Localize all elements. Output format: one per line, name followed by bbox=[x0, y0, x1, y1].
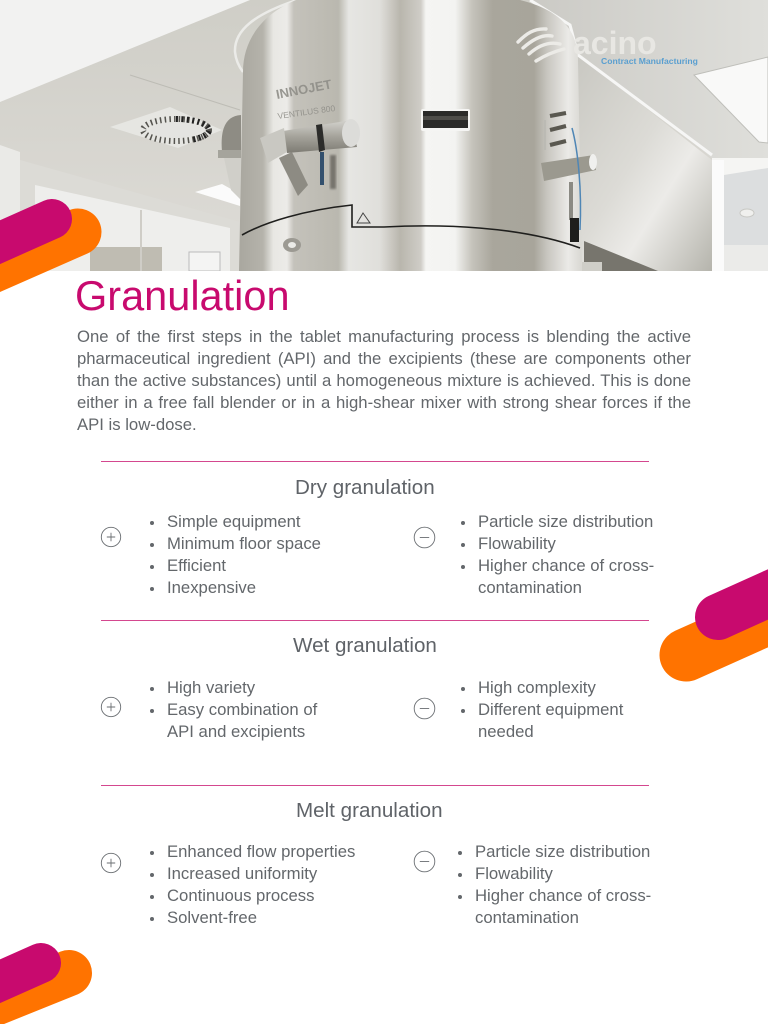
right ceiling bbox=[530, 0, 768, 158]
cons list: Flowability bbox=[478, 534, 556, 553]
pros list: Continuous process bbox=[167, 886, 314, 905]
vessel brand text: INNOJET bbox=[275, 76, 333, 102]
heading: wet granulation: Wet granulation bbox=[293, 634, 437, 657]
left nozzle assembly bbox=[260, 119, 360, 196]
cons list bbox=[458, 842, 651, 927]
pros list: Solvent-free bbox=[167, 908, 257, 927]
cons list bbox=[461, 678, 624, 741]
intro text block: either in a free fall blender or in a high-shear mixer with strong shear forces if the bbox=[77, 393, 691, 412]
intro text block: One of the first steps in the tablet manufacturing process is blending the active bbox=[77, 327, 691, 346]
heading: melt granulation: Melt granulation bbox=[296, 799, 443, 822]
pros list: Efficient bbox=[167, 556, 226, 575]
icon: minus bbox=[414, 698, 436, 720]
cons list bbox=[461, 512, 654, 597]
pros list bbox=[150, 512, 321, 597]
cons list: needed bbox=[478, 722, 534, 741]
pros list: API and excipients bbox=[167, 722, 305, 741]
right nozzle assembly bbox=[541, 113, 597, 242]
cons list: contamination bbox=[478, 578, 582, 597]
icon: minus bbox=[414, 526, 436, 548]
divider bbox=[101, 461, 649, 462]
pros list bbox=[150, 842, 355, 927]
photo: stainless steel granulator in clean room bbox=[0, 0, 768, 271]
vessel body bbox=[239, 0, 582, 271]
cons list: Flowability bbox=[475, 864, 553, 883]
right side room bbox=[712, 158, 768, 271]
section: melt granulation bbox=[100, 785, 651, 927]
pros list: Minimum floor space bbox=[167, 534, 321, 553]
section: dry granulation bbox=[100, 461, 654, 597]
logo bbox=[518, 25, 698, 66]
pros list: Easy combination of bbox=[167, 700, 317, 719]
ceiling vent bbox=[110, 107, 222, 148]
cons list: High complexity bbox=[478, 678, 596, 697]
vessel brand text: VENTILUS 800 bbox=[277, 103, 336, 121]
cons list: contamination bbox=[475, 908, 579, 927]
ceiling light bbox=[694, 57, 768, 143]
pros list: Enhanced flow properties bbox=[167, 842, 355, 861]
intro text block: pharmaceutical ingredient (API) and the excipients (these are components other bbox=[77, 349, 691, 368]
divider bbox=[101, 620, 649, 621]
side pipe bbox=[222, 115, 241, 152]
divider bbox=[101, 785, 649, 786]
intro text block: than the active substances) until a homogeneous mixture is achieved. This is done bbox=[77, 371, 691, 390]
clamp fitting bbox=[283, 238, 301, 252]
cons list: Particle size distribution bbox=[475, 842, 650, 861]
intro text block bbox=[77, 327, 691, 434]
icon: plus bbox=[100, 852, 122, 874]
title: Granulation bbox=[75, 272, 290, 319]
icon: plus bbox=[100, 696, 122, 718]
pros list bbox=[150, 678, 318, 741]
pros list: Inexpensive bbox=[167, 578, 256, 597]
icon: plus bbox=[100, 526, 122, 548]
intro text block: API is low-dose. bbox=[77, 415, 197, 434]
cons list: Different equipment bbox=[478, 700, 623, 719]
lower cone bbox=[584, 241, 658, 271]
heading: dry granulation: Dry granulation bbox=[295, 476, 435, 499]
pros list: Increased uniformity bbox=[167, 864, 317, 883]
vessel seam line bbox=[242, 205, 580, 248]
sight window bbox=[421, 109, 470, 131]
pros list: Simple equipment bbox=[167, 512, 301, 531]
vessel rim bbox=[235, 0, 297, 72]
cons list: Higher chance of cross- bbox=[478, 556, 654, 575]
decorative pills: bottom left bbox=[0, 943, 92, 1024]
logo tagline: Contract Manufacturing bbox=[601, 56, 698, 66]
bright upper ceiling bbox=[0, 0, 250, 102]
logo wordmark: acino bbox=[573, 25, 657, 61]
icon: minus bbox=[414, 850, 436, 872]
cons list: Particle size distribution bbox=[478, 512, 653, 531]
logo mark bbox=[518, 29, 564, 61]
left wall and window bbox=[0, 145, 20, 220]
decorative pills: right bbox=[660, 569, 768, 682]
pros list: High variety bbox=[167, 678, 255, 697]
section: wet granulation bbox=[100, 620, 649, 741]
soffit line bbox=[130, 75, 240, 110]
decorative pills: top left bbox=[0, 199, 102, 292]
right wall behind vessel bbox=[578, 55, 712, 271]
cons list: Higher chance of cross- bbox=[475, 886, 651, 905]
vessel brand text bbox=[275, 76, 336, 121]
